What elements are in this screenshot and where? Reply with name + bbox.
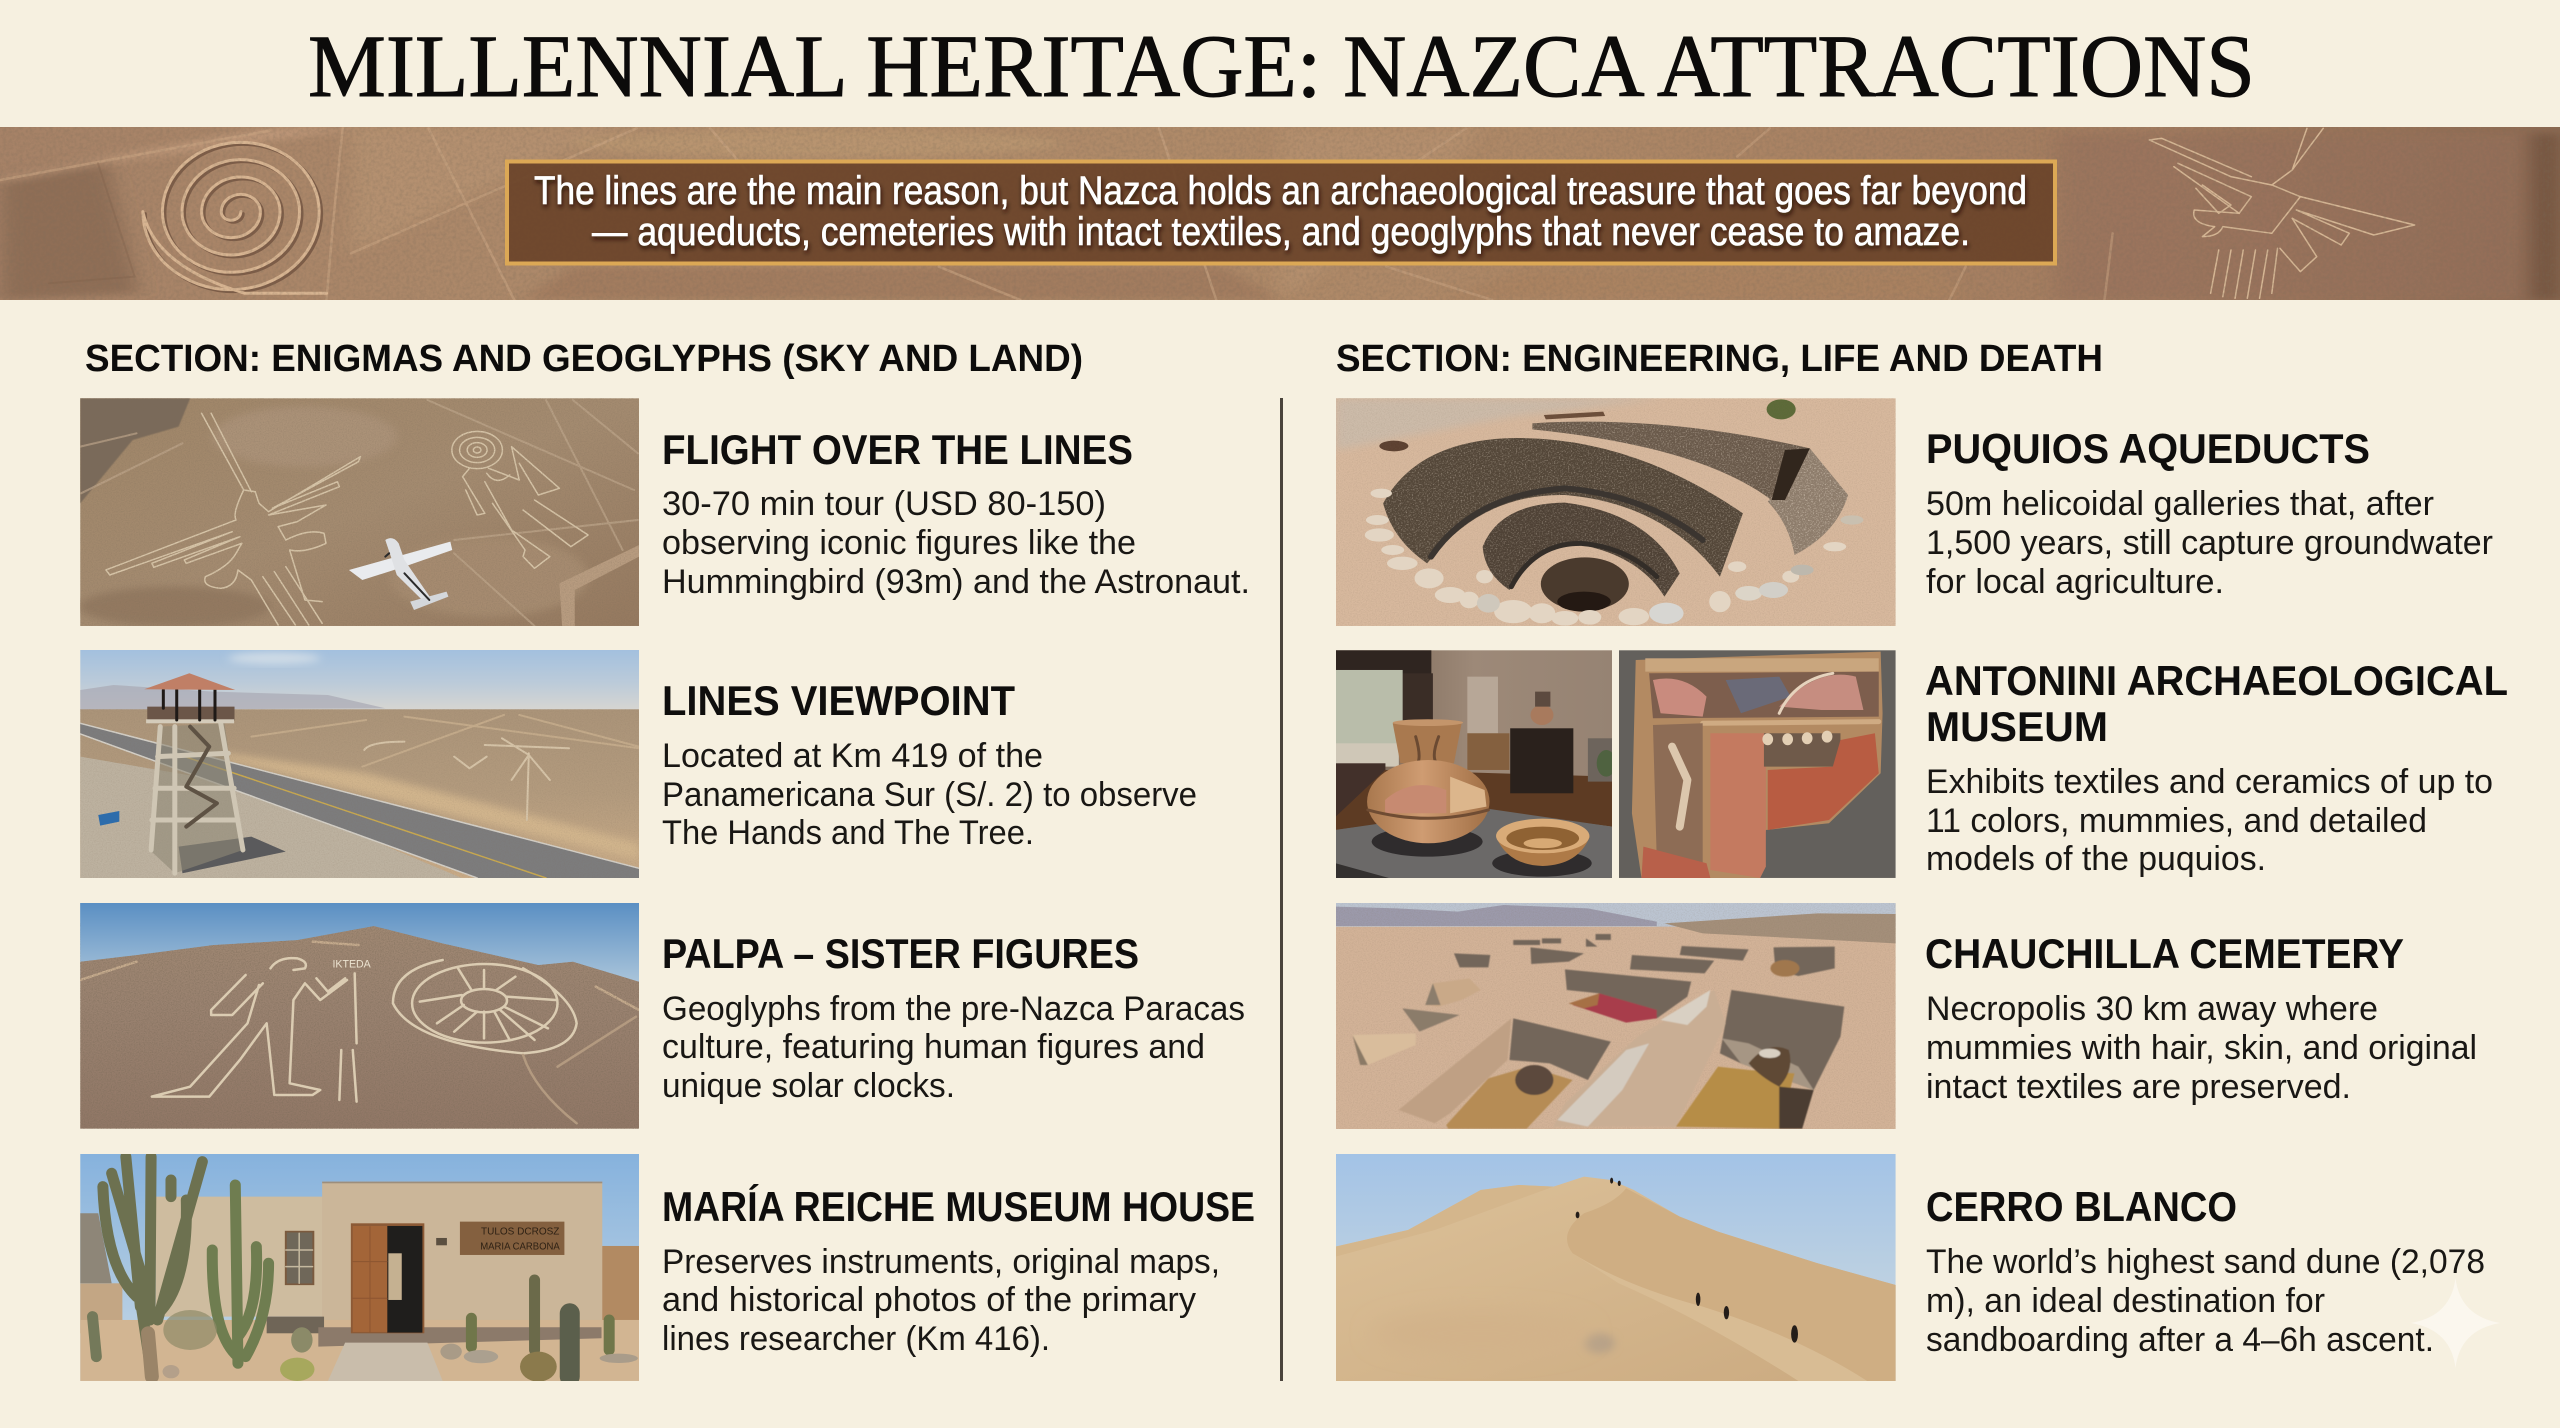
description: flight: Hummingbird (93m) and the Astronaut. [662,563,1250,601]
description: flight: observing iconic figures like the [662,524,1136,562]
banner: desert geoglyph strip with intro callout [0,127,2560,300]
description: palpa [662,990,1245,1105]
description: puquios [1926,485,2493,601]
photo: museum house with cacti [80,1154,639,1382]
item: chauchilla cemetery [1336,903,2477,1129]
description: viewpoint: Panamericana Sur (S/. 2) to observe [662,776,1197,814]
heading: puquios: PUQUIOS AQUEDUCTS [1926,425,2370,472]
photo: ancient textile fragment [1619,650,1896,878]
photo: museum house with cacti: TULOS DCROSZ [481,1226,560,1237]
icon: cacti [93,1157,638,1382]
photo: open tombs with mummies [1336,903,1896,1129]
photo: palpa hillside geoglyphs [80,903,639,1129]
icon: airplane [349,538,452,610]
heading: viewpoint: LINES VIEWPOINT [662,677,1015,724]
description: puquios: 50m helicoidal galleries that, after [1926,485,2434,523]
description: palpa: unique solar clocks. [662,1067,955,1105]
description: viewpoint: Located at Km 419 of the [662,737,1043,775]
description: museum house: Preserves instruments, original maps, [662,1243,1220,1281]
description: cerro blanco [1926,1243,2485,1359]
item: cerro blanco [1336,1154,2500,1381]
photo: palpa hillside geoglyphs: IKTEDA [332,957,371,970]
heading: flight: FLIGHT OVER THE LINES [662,426,1133,473]
item: puquios aqueducts [1336,398,2493,626]
heading: antonini: MUSEUM [1926,703,2108,750]
description: flight: 30-70 min tour (USD 80-150) [662,485,1106,523]
icon: painted vase [1367,719,1490,843]
description: museum house: lines researcher (Km 416). [662,1320,1050,1358]
description: viewpoint: The Hands and The Tree. [662,814,1034,852]
panel: left section, enigmas and geoglyphs [79,338,1255,1382]
description: flight [662,485,1250,601]
description: palpa: culture, featuring human figures and [662,1028,1205,1066]
description: puquios: 1,500 years, still capture groundwater [1926,524,2493,562]
item: maria reiche museum house [80,1154,1255,1382]
banner background photo [0,127,2560,300]
photo: museum house with cacti: MARIA CARBONA [480,1241,561,1252]
photo: viewpoint tower and road [80,650,639,878]
photo: giant sand dune with hikers [1336,1154,1896,1381]
description: viewpoint [662,737,1197,852]
description: chauchilla: mummies with hair, skin, and original [1926,1029,2477,1067]
heading: chauchilla: CHAUCHILLA CEMETERY [1925,930,2404,977]
section heading right: SECTION: ENGINEERING, LIFE AND DEATH [1336,338,2103,380]
photo: spiral aqueduct [1336,398,1896,626]
title: MILLENNIAL HERITAGE: NAZCA ATTRACTIONS [308,18,2255,116]
description: museum house: and historical photos of the primary [662,1281,1196,1319]
description: antonini: 11 colors, mummies, and detailed [1926,802,2427,840]
icon: painted bowl [1496,819,1590,866]
description: chauchilla: intact textiles are preserved. [1926,1068,2351,1106]
intro text [534,169,2027,254]
description: cerro blanco: The world’s highest sand dune (2,078 [1926,1243,2485,1281]
section heading left: SECTION: ENIGMAS AND GEOGLYPHS (SKY AND LAND) [85,338,1083,380]
description: museum house [662,1243,1220,1358]
description: puquios: for local agriculture. [1926,563,2224,601]
item: palpa sister figures [80,903,1245,1129]
description: cerro blanco: sandboarding after a 4–6h ascent. [1926,1321,2434,1359]
panel: right section, engineering, life and death [1336,338,2508,1381]
description: antonini: Exhibits textiles and ceramics of up to [1926,763,2493,801]
intro text: The lines are the main reason, but Nazca holds an archaeological treasure that goes far beyond [534,169,2027,213]
description: antonini [1926,763,2493,878]
item: antonini archaeological museum [1336,650,2508,878]
heading: antonini [1925,657,2508,750]
item: flight over the lines [79,398,1250,627]
item: lines viewpoint [80,650,1197,878]
heading: antonini: ANTONINI ARCHAEOLOGICAL [1925,657,2508,704]
description: palpa: Geoglyphs from the pre-Nazca Paracas [662,990,1245,1028]
description: antonini: models of the puquios. [1926,840,2266,878]
intro text: — aqueducts, cemeteries with intact textiles, and geoglyphs that never cease to amaze. [592,210,1970,254]
heading: palpa: PALPA – SISTER FIGURES [662,930,1139,977]
description: chauchilla: Necropolis 30 km away where [1926,990,2378,1028]
photo: plane over geoglyphs [79,398,639,627]
sparkle watermark [2411,1278,2500,1368]
photo: ceramic vases in museum [1336,650,1616,878]
icon: viewpoint tower [144,673,243,873]
description: cerro blanco: m), an ideal destination for [1926,1282,2325,1320]
heading: museum house: MARÍA REICHE MUSEUM HOUSE [662,1183,1255,1230]
description: chauchilla [1926,990,2477,1106]
column divider [1280,398,1283,1381]
heading: cerro blanco: CERRO BLANCO [1926,1183,2237,1230]
intro callout box [507,162,2055,264]
